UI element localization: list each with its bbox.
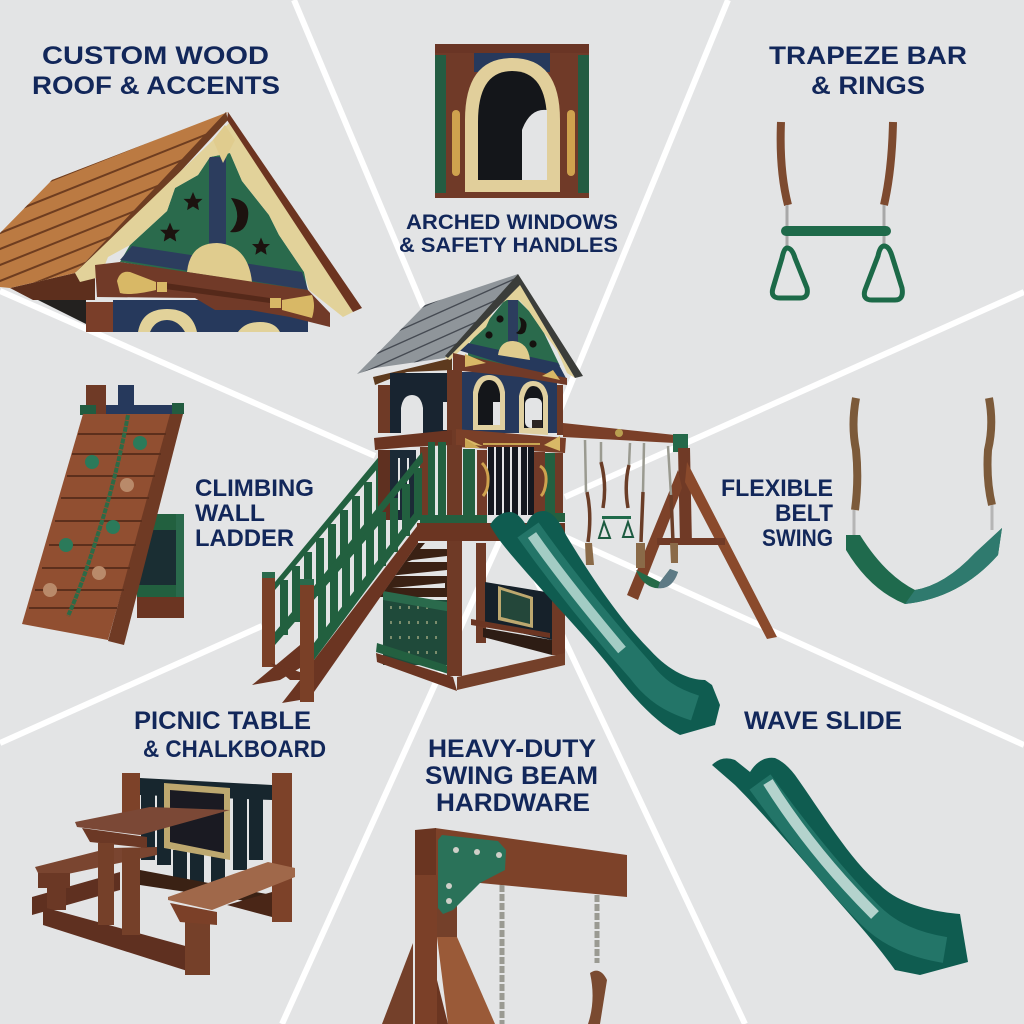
panel: arched windows and safety handles [399,44,618,257]
roof [357,274,518,374]
heading: trapeze [769,42,967,100]
icon: stars and moon [160,192,270,255]
under-deck stairs [380,543,447,597]
heading: swing beam hardware: HARDWARE [436,789,590,817]
panel: wave slide [712,707,968,975]
illustration: wave slide [712,758,968,975]
swing frame [563,423,777,639]
heading: custom wood roof: ROOF & ACCENTS [32,72,280,100]
heading: arched windows: ARCHED WINDOWS [406,211,618,234]
heading: custom wood roof [32,42,280,100]
panel: flexible belt swing [721,398,1002,604]
panel: climbing wall ladder [22,385,314,645]
front stairs [270,452,423,703]
panel: trapeze bar and rings [769,42,967,300]
chalkboard section [471,543,565,655]
gable [445,274,583,385]
heading: picnic table [134,707,326,763]
balcony railing [378,442,565,530]
heading: flexible belt swing: SWING [762,525,833,552]
panel: picnic table and chalkboard [32,707,326,975]
illustration: climbing wall [22,385,184,645]
balcony bands [374,429,566,453]
heading: wave slide: WAVE SLIDE [744,707,902,735]
heading: climbing wall: WALL [195,500,265,527]
icon: belt swing [846,398,1002,604]
slide [490,511,720,735]
heading: arched windows: & SAFETY HANDLES [399,234,618,257]
heading: trapeze: & RINGS [811,72,925,100]
heading: climbing wall: CLIMBING [195,475,314,502]
base frame [376,541,565,691]
panel: heavy-duty swing beam hardware [382,735,627,1024]
illustration: swing beam bracket [382,828,627,1024]
tower upper [373,274,583,541]
icon: right broom [270,295,314,318]
lower fence [376,591,452,675]
icon: trapeze bar [772,122,902,300]
icon: left broom [117,272,167,294]
illustration: roof gable [0,105,362,333]
heading: swing beam hardware [425,735,598,817]
heading: picnic table: & CHALKBOARD [143,736,326,763]
heading: climbing wall: LADDER [195,525,294,552]
heading: swing beam hardware: SWING BEAM [425,762,598,790]
back stairs railing [252,453,383,685]
panel: custom wood roof and accents [0,42,362,333]
heading: custom wood roof: CUSTOM WOOD [42,42,269,70]
illustration: arched window [435,44,589,198]
heading: swing beam hardware: HEAVY-DUTY [428,735,596,763]
heading: flexible belt swing: BELT [775,500,833,527]
heading: arched windows [399,211,618,257]
heading: climbing wall [195,475,314,552]
heading: flexible belt swing: FLEXIBLE [721,475,833,502]
heading: picnic table: PICNIC TABLE [134,707,311,735]
illustration: picnic table [32,773,295,975]
heading: trapeze: TRAPEZE BAR [769,42,967,70]
illustration: central playset [252,259,777,735]
heading: flexible belt swing [721,475,833,552]
